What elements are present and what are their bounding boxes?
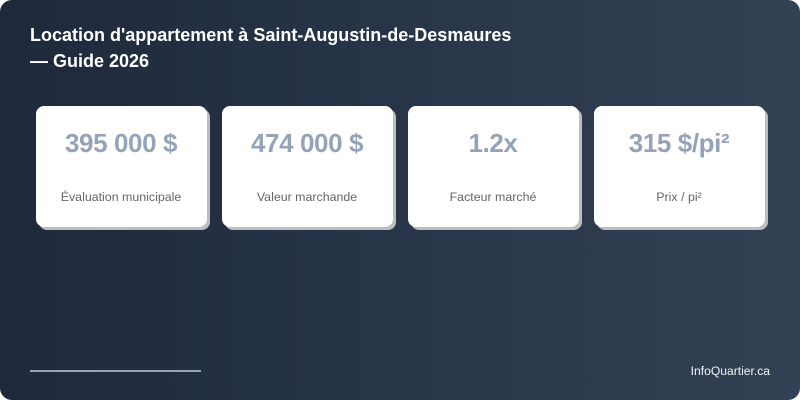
- panel: valeur marchande: [222, 106, 393, 227]
- value: prix: 315 $/pi²: [629, 128, 729, 158]
- title: — Guide 2026: [30, 51, 149, 71]
- value: facteur: 1.2x: [468, 128, 518, 158]
- title: Location d'appartement à Saint-Augustin-de-Desmaures: [30, 25, 511, 45]
- label: valeur marchande: Valeur marchande: [257, 190, 357, 204]
- panel: facteur marché: [408, 106, 579, 227]
- label: facteur: Facteur marché: [450, 190, 536, 204]
- panel: prix au pied carré: [594, 106, 765, 227]
- label: prix: Prix / pi²: [656, 190, 702, 204]
- value: valeur marchande: 474 000 $: [251, 128, 363, 158]
- footer brand: InfoQuartier.ca: [691, 364, 770, 378]
- title: [30, 25, 511, 71]
- value: évaluation: 395 000 $: [65, 128, 177, 158]
- panel: évaluation municipale: [36, 106, 207, 227]
- footer accent line: [30, 370, 201, 372]
- label: évaluation: Évaluation municipale: [61, 190, 181, 204]
